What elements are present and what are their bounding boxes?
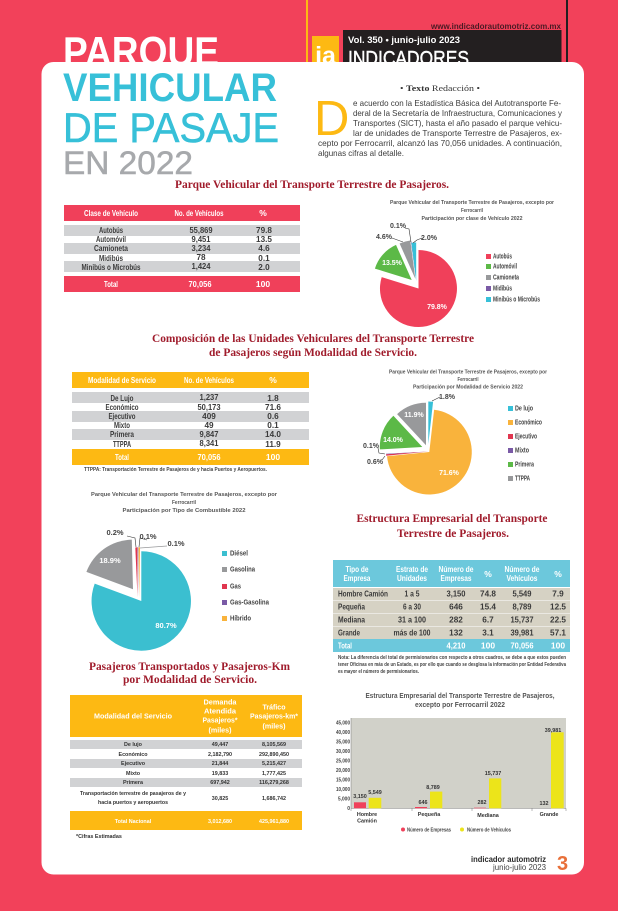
bar chart: estructura empresarial: 15,737 bbox=[485, 771, 501, 777]
table: modalidad de servicio: 1.8 bbox=[267, 394, 279, 403]
table: pasajeros transportados: 1,686,742 bbox=[262, 796, 286, 802]
pie chart: tipo de combustible: 0.2% bbox=[106, 528, 124, 537]
bar chart: estructura empresarial: 25,000 bbox=[336, 758, 350, 764]
table: pasajeros transportados: hacia puertos y aeropuertos bbox=[98, 800, 168, 806]
bar chart: estructura empresarial: 5,549 bbox=[368, 790, 382, 796]
pie chart: tipo de combustible: 0.1% bbox=[139, 532, 157, 541]
table: estructura empresarial: Hombre Camión bbox=[338, 590, 388, 598]
logo: ia: ia bbox=[315, 42, 337, 70]
website url: www.indicadorautomotriz.com.mx bbox=[430, 22, 562, 31]
table: clase de vehiculo: Total bbox=[104, 279, 118, 289]
table: estructura empresarial: 3.1 bbox=[482, 628, 494, 638]
pie chart: modalidad de servicio bbox=[363, 370, 548, 495]
heading: pasajeros transportados: Pasajeros Transportados y Pasajeros-Km bbox=[89, 659, 290, 673]
table: modalidad de servicio: De Lujo bbox=[110, 394, 134, 403]
issue banner: INDICADORES bbox=[348, 48, 469, 70]
table: modalidad de servicio: 409 bbox=[202, 412, 216, 421]
table: estructura empresarial: Número de bbox=[438, 564, 474, 574]
pie chart: clase de vehiculo: 4.6% bbox=[376, 234, 393, 241]
bar chart: estructura empresarial: 0 bbox=[347, 806, 350, 812]
table: estructura empresarial: más de 100 bbox=[394, 628, 431, 638]
bar chart: estructura empresarial: 15,000 bbox=[336, 778, 350, 784]
pie chart: tipo de combustible: Gasolina bbox=[230, 566, 255, 574]
intro text: cepto por Ferrocarril, alcanzó las 70,056 unidades. A continuación, bbox=[318, 138, 562, 148]
table: clase de vehiculo: Clase de Vehículo bbox=[84, 208, 138, 218]
table: pasajeros transportados: Mixto bbox=[126, 771, 141, 777]
bar chart: estructura empresarial: Número de Empresas bbox=[407, 828, 451, 834]
table: modalidad de servicio: 50,173 bbox=[198, 403, 221, 412]
table: pasajeros transportados: Ejecutivo bbox=[121, 761, 146, 767]
table: pasajeros transportados: Total Nacional bbox=[115, 819, 152, 825]
table note: permisionarios: tener Oficinas en más de un Estado, es por ello que cuando se desglosa la información por Entidad Federativa bbox=[338, 662, 566, 668]
title bbox=[63, 66, 279, 181]
table: clase de vehiculo: 9,451 bbox=[192, 235, 211, 244]
pie chart: modalidad de servicio: 11.9% bbox=[404, 412, 425, 419]
table: clase de vehiculo: 1,424 bbox=[192, 262, 211, 271]
intro text: e acuerdo con la Estadística Básica del Autotransporte Fe- bbox=[353, 98, 561, 108]
pie chart: tipo de combustible: Híbrido bbox=[230, 616, 251, 622]
pie chart: clase de vehiculo: 79.8% bbox=[427, 304, 448, 311]
table: clase de vehiculo bbox=[64, 205, 300, 292]
table: pasajeros transportados: 5,215,427 bbox=[262, 761, 286, 767]
bar chart: estructura empresarial: 132 bbox=[540, 801, 548, 807]
table: estructura empresarial: Estrato de bbox=[396, 564, 428, 574]
table note: TTPPA: TTPPA: Transportación Terrestre de Pasajeros de y hacia Puertos y Aeropuertos. bbox=[84, 467, 267, 473]
table: clase de vehiculo: No. de Vehículos bbox=[174, 208, 224, 218]
table: modalidad de servicio: Primera bbox=[110, 430, 134, 439]
table: clase de vehiculo: 79.8 bbox=[256, 226, 272, 235]
pie chart: clase de vehiculo: Parque Vehicular del Transporte Terrestre de Pasajeros, excepto por bbox=[390, 200, 555, 206]
table: estructura empresarial: 100 bbox=[481, 640, 495, 650]
byline: • Texto Redacción • bbox=[400, 83, 480, 93]
table: estructura empresarial: 6 a 30 bbox=[403, 602, 421, 612]
intro text: deral de la Secretaría de Infraestructura, Comunicaciones y bbox=[353, 108, 563, 118]
bar chart: estructura empresarial: 282 bbox=[478, 800, 486, 806]
table: estructura empresarial: 132 bbox=[449, 628, 463, 638]
bar chart: estructura empresarial: 39,981 bbox=[545, 728, 561, 734]
page number: 3 bbox=[557, 853, 568, 875]
pie chart: tipo de combustible: Diésel bbox=[230, 550, 248, 558]
white panel bbox=[42, 62, 584, 874]
table: modalidad de servicio: 49 bbox=[204, 421, 214, 430]
table: estructura empresarial: 57.1 bbox=[550, 628, 566, 638]
bar chart: estructura empresarial: 5,000 bbox=[338, 796, 350, 802]
footer: publication bbox=[471, 855, 547, 872]
table: estructura empresarial: Pequeña bbox=[338, 602, 365, 612]
table note: cifras estimadas: *Cifras Estimadas bbox=[76, 834, 122, 840]
bar chart: estructura empresarial: 646 bbox=[418, 800, 428, 806]
heading: estructura empresarial: Estructura Empresarial del Transporte bbox=[356, 511, 548, 525]
intro text: Transportes (SICT), hasta el año pasado el parque vehicu- bbox=[353, 118, 562, 128]
table: estructura empresarial: 22.5 bbox=[550, 616, 566, 624]
pie chart: modalidad de servicio: Ferrocarril bbox=[458, 377, 479, 383]
table: pasajeros transportados: Tráfico bbox=[262, 702, 286, 712]
bar chart: estructura empresarial: Estructura Empresarial del Transporte Terrestre de Pasajeros, bbox=[366, 691, 554, 700]
pie chart: tipo de combustible: Gas bbox=[230, 584, 241, 590]
table: estructura empresarial: 3,150 bbox=[446, 590, 466, 598]
table: clase de vehiculo: 55,869 bbox=[190, 226, 213, 235]
table: pasajeros transportados: 49,447 bbox=[212, 742, 228, 748]
table: pasajeros transportados: Demanda bbox=[204, 698, 237, 706]
table: clase de vehiculo: 70,056 bbox=[188, 279, 212, 289]
table: estructura empresarial: 7.9 bbox=[552, 590, 564, 598]
table: modalidad de servicio: 9,847 bbox=[200, 430, 219, 439]
bar chart: estructura empresarial: 30,000 bbox=[336, 749, 350, 755]
intro text bbox=[318, 98, 563, 158]
pie chart: clase de vehiculo: Autobús bbox=[493, 254, 512, 260]
table: estructura empresarial: 70,056 bbox=[510, 640, 534, 650]
heading: composicion: Composición de las Unidades Vehiculares del Transporte Terrestre bbox=[152, 331, 475, 345]
table: estructura empresarial: 4,210 bbox=[446, 640, 466, 650]
table: clase de vehiculo: 100 bbox=[256, 279, 270, 289]
logo: ia bbox=[312, 36, 339, 70]
table: pasajeros transportados: De lujo bbox=[124, 742, 143, 748]
issue banner: Vol. 350 • junio-julio 2023 bbox=[348, 35, 460, 45]
drop cap: D bbox=[314, 92, 349, 146]
table: pasajeros transportados: (miles) bbox=[262, 722, 286, 730]
table: estructura empresarial: % bbox=[484, 569, 492, 579]
table: pasajeros transportados: 8,105,569 bbox=[262, 742, 286, 748]
bar chart: estructura empresarial: 40,000 bbox=[336, 730, 350, 736]
table: estructura empresarial: 5,549 bbox=[512, 590, 532, 598]
table: estructura empresarial: 39,981 bbox=[510, 628, 534, 638]
table: estructura empresarial: Empresas bbox=[440, 573, 472, 583]
table: modalidad de servicio: 100 bbox=[266, 452, 280, 462]
intro text: lar de unidades de Transporte Terrestre de Pasajeros, ex- bbox=[353, 128, 562, 138]
table: modalidad de servicio: TTPPA bbox=[113, 440, 131, 449]
bar chart: estructura empresarial: 45,000 bbox=[336, 720, 350, 726]
table: estructura empresarial: Unidades bbox=[397, 573, 427, 583]
pie chart: modalidad de servicio: 71.6% bbox=[439, 470, 460, 477]
table: modalidad de servicio: Mixto bbox=[114, 421, 130, 430]
table: modalidad de servicio: Modalidad de Servicio bbox=[88, 375, 156, 385]
table: estructura empresarial: Total bbox=[338, 640, 352, 650]
table: pasajeros transportados: (miles) bbox=[208, 726, 232, 734]
table: estructura empresarial: 74.8 bbox=[480, 590, 496, 598]
heading: pasajeros transportados: por Modalidad de Servicio. bbox=[123, 672, 257, 686]
table: modalidad de servicio: 0.6 bbox=[267, 412, 279, 421]
heading: estructura empresarial bbox=[356, 511, 548, 540]
pie chart: modalidad de servicio: 1.8% bbox=[439, 394, 456, 401]
pie chart: clase de vehiculo bbox=[375, 200, 555, 327]
table: pasajeros transportados: 697,942 bbox=[210, 780, 230, 786]
table: pasajeros transportados: 30,825 bbox=[212, 796, 228, 802]
table note: permisionarios: es mayor el número de permisionarios. bbox=[338, 669, 420, 675]
table: pasajeros transportados: Atendida bbox=[204, 706, 237, 716]
title word: PARQUE: PARQUE bbox=[63, 28, 219, 75]
table: pasajeros transportados: Pasajeros* bbox=[202, 716, 238, 724]
table: modalidad de servicio: 1,237 bbox=[200, 393, 219, 402]
table: estructura empresarial: 8,789 bbox=[512, 602, 532, 612]
table: modalidad de servicio bbox=[72, 372, 309, 465]
table: estructura empresarial: Tipo de bbox=[346, 564, 369, 574]
table note: permisionarios: Nota: La diferencia del total de permisionarios con respecto a otros cuadros, se debe a que estos pueden bbox=[338, 655, 566, 661]
footer: publication: junio-julio 2023 bbox=[492, 863, 547, 872]
table: pasajeros transportados: Transportación terrestre de pasajeros de y bbox=[80, 791, 186, 797]
table: estructura empresarial: Empresa bbox=[344, 573, 371, 583]
table: estructura empresarial: 646 bbox=[449, 602, 463, 612]
table: clase de vehiculo: Automóvil bbox=[96, 235, 126, 244]
pie chart: tipo de combustible: 0.1% bbox=[167, 539, 185, 548]
table: clase de vehiculo: 2.0 bbox=[258, 263, 270, 272]
table: modalidad de servicio: Económico bbox=[106, 403, 138, 412]
table: clase de vehiculo: Autobús bbox=[99, 226, 123, 235]
table: modalidad de servicio: Ejecutivo bbox=[108, 412, 136, 421]
table: estructura empresarial: 1 a 5 bbox=[404, 590, 420, 598]
table: pasajeros transportados: 2,182,790 bbox=[208, 752, 232, 758]
title: VEHICULAR bbox=[63, 66, 277, 110]
bar chart: estructura empresarial bbox=[336, 691, 566, 834]
table: pasajeros transportados: Primera bbox=[123, 780, 144, 786]
pie chart: tipo de combustible bbox=[86, 492, 278, 651]
bar chart: estructura empresarial: 20,000 bbox=[336, 768, 350, 774]
pie chart: modalidad de servicio: 0.6% bbox=[367, 459, 384, 466]
table: estructura empresarial: 31 a 100 bbox=[398, 616, 426, 624]
issue banner bbox=[343, 30, 562, 70]
table: pasajeros transportados: 292,890,450 bbox=[259, 752, 289, 758]
heading: composicion bbox=[152, 331, 475, 359]
heading: composicion: de Pasajeros según Modalidad de Servicio. bbox=[209, 345, 417, 359]
heading: parque vehicular: Parque Vehicular del Transporte Terrestre de Pasajeros. bbox=[175, 177, 449, 191]
table: clase de vehiculo: Midibús bbox=[99, 254, 123, 263]
pie chart: clase de vehiculo: Camioneta bbox=[493, 274, 519, 282]
table: estructura empresarial: 15,737 bbox=[510, 616, 534, 624]
pie chart: clase de vehiculo: 0.1% bbox=[390, 223, 407, 230]
pie chart: tipo de combustible: Participación por Tipo de Combustible 2022 bbox=[122, 508, 246, 514]
table: estructura empresarial: 12.5 bbox=[550, 602, 566, 612]
table: estructura empresarial: Grande bbox=[338, 628, 360, 638]
bar chart: estructura empresarial: 3,150 bbox=[353, 794, 367, 800]
table: modalidad de servicio: No. de Vehículos bbox=[184, 375, 234, 385]
bar chart: estructura empresarial: 35,000 bbox=[336, 740, 350, 746]
bar chart: estructura empresarial: Número de Vehículos bbox=[467, 828, 511, 834]
pie chart: clase de vehiculo: Automóvil bbox=[493, 264, 517, 270]
table: modalidad de servicio: Total bbox=[115, 452, 129, 462]
table: pasajeros transportados: 19,833 bbox=[212, 771, 228, 777]
table: pasajeros transportados: 1,777,425 bbox=[262, 771, 286, 777]
table: pasajeros transportados: 3,012,680 bbox=[208, 819, 232, 825]
pie chart: modalidad de servicio: Mixto bbox=[515, 448, 529, 454]
pie chart: modalidad de servicio: Parque Vehicular del Transporte Terrestre de Pasajeros, excepto por bbox=[389, 370, 548, 376]
heading: estructura empresarial: Terrestre de Pasajeros. bbox=[397, 526, 509, 540]
pie chart: tipo de combustible: 18.9% bbox=[99, 556, 121, 565]
pie chart: clase de vehiculo: 13.5% bbox=[382, 260, 403, 267]
table: clase de vehiculo: Minibús o Microbús bbox=[82, 263, 141, 272]
table: pasajeros transportados: Pasajeros-km* bbox=[250, 712, 298, 720]
table: estructura empresarial: 282 bbox=[449, 616, 463, 624]
footer: publication: indicador automotriz bbox=[471, 855, 546, 864]
intro text: algunas cifras al detalle. bbox=[318, 148, 404, 158]
bar chart: estructura empresarial: Pequeña bbox=[418, 812, 441, 818]
table: clase de vehiculo: % bbox=[259, 208, 267, 218]
table: modalidad de servicio: 14.0 bbox=[265, 430, 281, 439]
table: estructura empresarial: 100 bbox=[551, 640, 565, 650]
table: estructura empresarial: Vehículos bbox=[506, 573, 538, 583]
table: pasajeros transportados bbox=[70, 695, 302, 830]
table: estructura empresarial: 6.7 bbox=[482, 616, 494, 624]
table: modalidad de servicio: 11.9 bbox=[265, 440, 281, 449]
table: pasajeros transportados: Modalidad del Servicio bbox=[94, 712, 172, 720]
bar chart: estructura empresarial: Mediana bbox=[477, 813, 500, 819]
bar chart: estructura empresarial: Camión bbox=[357, 818, 377, 824]
bar chart: estructura empresarial: excepto por Ferrocarril 2022 bbox=[415, 700, 505, 709]
pie chart: modalidad de servicio: Participación por Modalidad de Servicio 2022 bbox=[413, 384, 523, 390]
pie chart: modalidad de servicio: De lujo bbox=[515, 406, 533, 412]
pie chart: clase de vehiculo: Ferrocarril bbox=[461, 208, 483, 214]
table: clase de vehiculo: Camioneta bbox=[94, 244, 128, 253]
title: DE PASAJE bbox=[63, 104, 279, 151]
bar chart: estructura empresarial: Grande bbox=[540, 812, 558, 818]
title: EN 2022 bbox=[63, 145, 193, 181]
pie chart: tipo de combustible: 80.7% bbox=[155, 621, 177, 630]
table: modalidad de servicio: % bbox=[269, 375, 277, 385]
bar chart: estructura empresarial: 8,789 bbox=[426, 785, 440, 791]
table: modalidad de servicio: 71.6 bbox=[265, 403, 281, 412]
table: estructura empresarial: % bbox=[554, 569, 562, 579]
pie chart: tipo de combustible: Gas-Gasolina bbox=[230, 600, 269, 606]
table note: permisionarios bbox=[338, 655, 566, 675]
table: pasajeros transportados: 21,844 bbox=[212, 761, 228, 767]
pie chart: tipo de combustible: Parque Vehicular del Transporte Terrestre de Pasajeros, excepto por bbox=[91, 492, 278, 498]
table: pasajeros transportados: 425,961,880 bbox=[259, 819, 289, 825]
table: clase de vehiculo: 4.6 bbox=[258, 244, 270, 253]
table: clase de vehiculo: 13.5 bbox=[256, 235, 272, 244]
table: estructura empresarial: Mediana bbox=[338, 616, 365, 624]
pie chart: clase de vehiculo: 2.0% bbox=[421, 235, 438, 242]
table: modalidad de servicio: 70,056 bbox=[198, 452, 221, 462]
bar chart: estructura empresarial: 10,000 bbox=[336, 787, 350, 793]
pie chart: clase de vehiculo: Minibús o Microbús bbox=[493, 296, 540, 304]
table: clase de vehiculo: 3,234 bbox=[192, 244, 211, 253]
pie chart: tipo de combustible: Ferrocarril bbox=[172, 500, 196, 506]
pie chart: modalidad de servicio: Ejecutivo bbox=[515, 434, 537, 440]
table: estructura empresarial: 15.4 bbox=[480, 602, 496, 612]
pie chart: clase de vehiculo: Midibús bbox=[493, 286, 512, 292]
table: clase de vehiculo: 78 bbox=[196, 253, 206, 262]
table: modalidad de servicio: 0.1 bbox=[267, 421, 279, 430]
pie chart: modalidad de servicio: 0.1% bbox=[363, 443, 380, 450]
table: estructura empresarial bbox=[333, 560, 570, 652]
bar chart: estructura empresarial: Hombre bbox=[357, 812, 377, 818]
pie chart: modalidad de servicio: TTPPA bbox=[515, 476, 530, 482]
pie chart: modalidad de servicio: Primera bbox=[515, 462, 534, 468]
pie chart: modalidad de servicio: 14.0% bbox=[383, 437, 404, 444]
table: pasajeros transportados: Económico bbox=[118, 752, 148, 758]
pie chart: modalidad de servicio: Económico bbox=[515, 420, 542, 426]
table: clase de vehiculo: 0.1 bbox=[258, 254, 270, 263]
heading: pasajeros transportados bbox=[89, 659, 290, 686]
table: modalidad de servicio: 8,341 bbox=[200, 439, 219, 448]
table: estructura empresarial: Número de bbox=[504, 564, 540, 574]
pie chart: clase de vehiculo: Participación por clase de Vehículo 2022 bbox=[422, 216, 522, 222]
table: pasajeros transportados: 116,279,268 bbox=[259, 780, 289, 786]
